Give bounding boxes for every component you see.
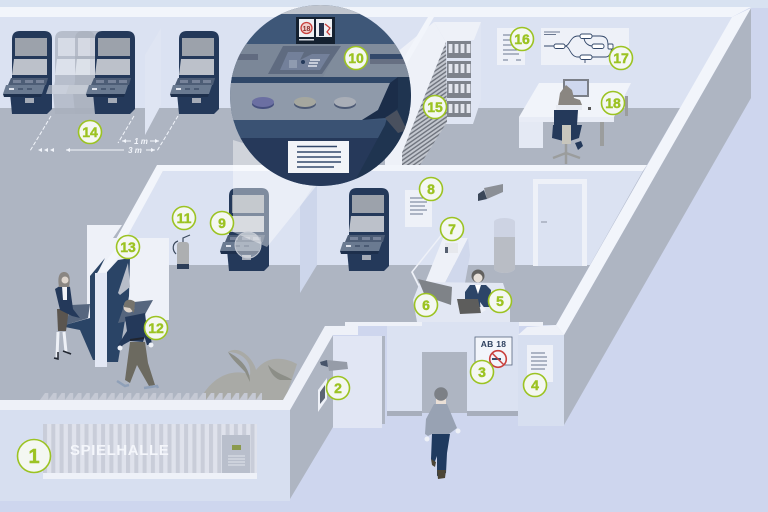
number badges	[18, 28, 632, 472]
badge 16: 16	[514, 31, 530, 47]
poster: age limit and warning	[296, 17, 335, 44]
badge 11: 11	[177, 210, 192, 226]
badge 13: 13	[120, 239, 136, 255]
age and no-smoking sign: AB 18	[481, 339, 506, 349]
badge 14	[78, 120, 102, 144]
document 4 on pillar	[527, 345, 553, 382]
right outer wall	[556, 8, 751, 425]
label	[288, 141, 349, 173]
storefront shutters	[43, 424, 257, 479]
badge 8: 8	[427, 181, 435, 197]
process chart 17 on wall	[541, 28, 629, 65]
badge 12	[144, 316, 168, 340]
camera at entrance	[320, 360, 348, 371]
machine	[340, 188, 389, 271]
badge 16	[510, 28, 534, 50]
man at machine	[117, 300, 158, 388]
floor	[0, 108, 680, 400]
badge 15: 15	[427, 99, 443, 115]
entrance pillar and counter walls	[333, 322, 543, 428]
badge 11	[172, 206, 196, 230]
double-sided machine	[65, 240, 153, 367]
badge 10: 10	[348, 50, 364, 66]
badge 17: 17	[613, 50, 629, 66]
badge 8	[420, 178, 442, 200]
badge 3	[470, 360, 494, 384]
wall partition	[300, 180, 317, 293]
surveillance camera	[478, 184, 503, 201]
document 16 on wall	[497, 28, 525, 65]
badge 3: 3	[478, 364, 486, 380]
button: tan	[294, 97, 316, 109]
magnifier beam	[233, 140, 330, 247]
badge 13	[116, 236, 140, 258]
badge 1: 1	[28, 446, 40, 468]
badge 9: 9	[218, 215, 226, 231]
reception employee	[465, 270, 491, 307]
top wall edge	[0, 7, 751, 17]
fire extinguisher	[173, 235, 190, 269]
badge 6	[414, 294, 438, 316]
age and no-smoking sign	[475, 337, 512, 367]
document 8 on wall	[405, 190, 432, 227]
button: grey	[334, 97, 356, 109]
floor markings: distances	[30, 116, 178, 155]
water cooler	[494, 218, 515, 273]
door	[533, 179, 587, 266]
partition between machines	[145, 28, 161, 135]
badge 12: 12	[148, 320, 164, 336]
front wall	[0, 326, 358, 501]
badge 2	[326, 376, 350, 400]
badge 10	[344, 46, 368, 70]
walking visitor	[424, 387, 460, 479]
notice on side wall	[318, 378, 327, 412]
badge 1	[18, 440, 50, 472]
machine 9 with detail lens	[220, 188, 269, 271]
shop name: SPIELHALLE	[70, 442, 169, 459]
filing shelf	[385, 17, 481, 165]
badge 4: 4	[531, 377, 539, 393]
back wall	[0, 17, 732, 108]
floor markings: distances: 3 m	[128, 146, 142, 155]
badge 14: 14	[82, 124, 98, 140]
badge 2: 2	[334, 380, 342, 396]
badge 18	[602, 92, 624, 114]
badge 18: 18	[605, 95, 621, 111]
reception monitor	[418, 279, 452, 305]
badge 17	[610, 46, 632, 70]
office employee on chair	[552, 85, 583, 164]
badge 6: 6	[422, 297, 430, 313]
panel behind double machine	[87, 225, 169, 320]
lower room wall	[110, 171, 643, 265]
detail lens	[230, 5, 411, 186]
reception desk	[411, 232, 510, 322]
badge 7: 7	[448, 221, 456, 237]
floor markings: distances: 1 m	[134, 137, 148, 146]
badge 7	[440, 218, 464, 240]
laptop	[457, 299, 486, 314]
office desk with monitor	[519, 79, 631, 148]
woman at machine	[54, 272, 80, 359]
badge 9	[210, 212, 234, 234]
badge 5: 5	[496, 293, 504, 309]
plant	[200, 350, 297, 400]
wall edge between rooms	[96, 165, 647, 275]
badge 15	[424, 96, 446, 118]
row of gaming machines with 1 m spacing	[3, 31, 219, 114]
right pillar	[518, 325, 564, 426]
badge 4	[524, 374, 546, 396]
button: purple	[252, 97, 274, 109]
small magnifier	[235, 232, 261, 258]
poster: age limit and warning: 18	[303, 26, 310, 33]
badge 5	[488, 290, 512, 312]
